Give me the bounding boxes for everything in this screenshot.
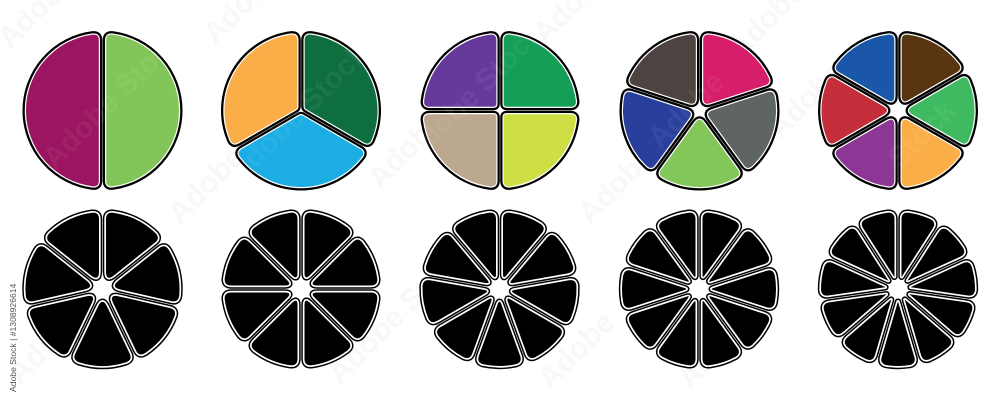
watermark over colour charts: Stock — [882, 94, 963, 175]
segment: sky blue — [239, 115, 363, 187]
watermark on background: Adobe Stock — [362, 42, 515, 195]
segment: purple — [411, 22, 530, 141]
watermark on background: Adobe — [762, 56, 851, 145]
chart: six segments — [822, 28, 974, 193]
watermark over colour charts — [37, 17, 963, 190]
chart: nine black segments — [420, 209, 579, 366]
watermark on background: Adobe — [532, 306, 621, 395]
segment: dark brown-grey — [622, 25, 726, 126]
chart: three segments — [204, 18, 398, 187]
segment: green — [660, 120, 739, 187]
watermark on background: Adobe — [162, 141, 251, 230]
segment: green — [909, 77, 974, 144]
segment: lime — [470, 80, 589, 199]
watermark over colour charts: Adobe — [642, 66, 731, 155]
segment: green — [470, 22, 589, 141]
segment: brown — [875, 28, 965, 118]
watermark on background: Adobe — [572, 141, 661, 230]
segment: red — [822, 77, 887, 144]
chart: five segments — [614, 25, 785, 187]
segment: purple — [831, 103, 921, 193]
segment: pink — [673, 25, 777, 126]
segment: grey — [696, 75, 785, 172]
chart: eight black segments — [221, 209, 381, 369]
segment: dark green — [274, 18, 398, 162]
segment: green half — [106, 35, 179, 186]
segment: tan — [411, 80, 530, 199]
chart: four segments — [411, 22, 589, 199]
watermark over colour charts: Adobe Stock — [397, 17, 550, 170]
watermark on background: Adobe — [882, 291, 971, 380]
segment: magenta half — [26, 35, 99, 186]
segment: orange — [875, 103, 965, 193]
chart: ten black segments — [622, 210, 776, 368]
segment: orange — [204, 18, 328, 162]
chart: seven black segments — [21, 207, 184, 366]
watermark on background: Adobe — [2, 301, 91, 390]
chart: eleven black segments — [819, 210, 977, 366]
watermark on background: Adobe — [672, 306, 761, 395]
segment: blue — [831, 28, 921, 118]
segment: blue — [614, 75, 703, 172]
watermark over colour charts: Adobe Stock — [222, 37, 375, 190]
watermark over colour charts: Adobe Stock — [37, 22, 190, 175]
watermark on background: Adobe Stock — [322, 237, 475, 390]
chart: two segments — [26, 35, 179, 186]
side credit text: Adobe Stock | #1308926614 — [8, 283, 18, 392]
